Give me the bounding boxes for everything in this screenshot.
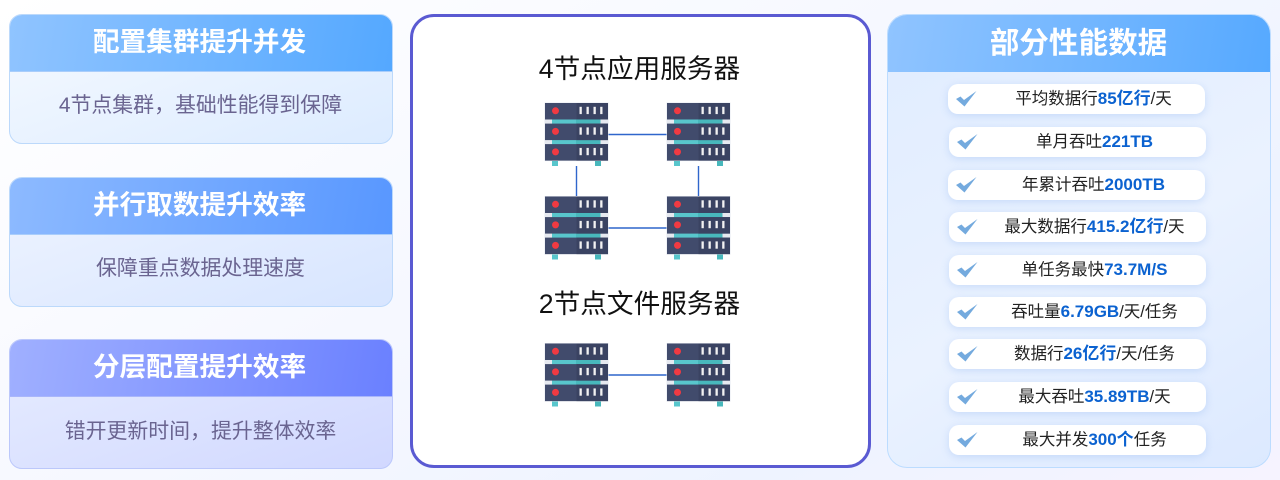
panel: 部分性能数据 <box>887 14 1271 468</box>
stat row: 最大并发 <box>949 425 1206 455</box>
stat row: 单任务最快: 单任务最快73.7M/S <box>1022 260 1167 279</box>
icon: application server 4 <box>666 196 730 260</box>
text: 保障重点数据处理速度: 保障重点数据处理速度 <box>96 257 305 280</box>
panel: 并行取数提升效率 <box>9 177 393 307</box>
icon: file server 2 <box>666 343 730 406</box>
stat row: 平均数据行 <box>948 84 1205 114</box>
panel: 配置集群提升并发 <box>9 14 393 144</box>
stat row: 最大吞吐 <box>949 382 1206 412</box>
heading: 部分性能数据 <box>887 14 1270 72</box>
icon: application server 3 <box>544 196 608 260</box>
stat row: 数据行 <box>949 339 1206 369</box>
panel: 分层配置提升效率 <box>9 339 393 469</box>
heading: 配置集群提升并发 <box>9 14 393 72</box>
stat row: 最大吞吐: 最大吞吐35.89TB/天 <box>1018 387 1171 406</box>
text: 4节点集群: 4节点集群，基础性能得到保障 <box>59 94 342 117</box>
heading: 部分性能数据: 部分性能数据 <box>990 27 1167 60</box>
icon: file server 1 <box>544 343 608 406</box>
heading: 配置集群提升并发: 配置集群提升并发 <box>93 27 306 57</box>
heading: 并行取数提升效率 <box>9 177 393 235</box>
stat row: 单月吞吐 <box>949 127 1206 157</box>
heading: 并行取数提升效率: 并行取数提升效率 <box>93 190 306 220</box>
icon: application server 2 <box>666 102 730 166</box>
stat row: 吞吐量 <box>949 297 1206 327</box>
heading: 分层配置提升效率 <box>9 339 393 397</box>
stat row: 平均数据行: 平均数据行85亿行/天 <box>1015 89 1172 108</box>
connector line: file servers <box>608 374 667 376</box>
stat row: 最大并发: 最大并发300个任务 <box>1022 430 1167 449</box>
connector lines: application servers <box>576 134 698 228</box>
text: 错开更新时间: 错开更新时间，提升整体效率 <box>65 420 336 443</box>
stat row: 数据行: 数据行26亿行/天/任务 <box>1014 344 1175 363</box>
stat row: 吞吐量: 吞吐量6.79GB/天/任务 <box>1011 302 1178 321</box>
panel: server topology <box>410 14 871 468</box>
stat row: 最大数据行 <box>949 212 1206 242</box>
icon: application server 1 <box>544 102 608 166</box>
stat row: 单任务最快 <box>949 255 1206 285</box>
heading: 4节点应用服务器: 4节点应用服务器 <box>539 54 740 84</box>
stat row: 单月吞吐: 单月吞吐221TB <box>1036 132 1153 151</box>
stat row: 年累计吞吐: 年累计吞吐2000TB <box>1022 175 1165 194</box>
heading: 2节点文件服务器: 2节点文件服务器 <box>539 289 740 319</box>
heading: 分层配置提升效率: 分层配置提升效率 <box>93 352 306 382</box>
stat row: 最大数据行: 最大数据行415.2亿行/天 <box>1004 217 1185 236</box>
stat row: 年累计吞吐 <box>948 170 1205 200</box>
